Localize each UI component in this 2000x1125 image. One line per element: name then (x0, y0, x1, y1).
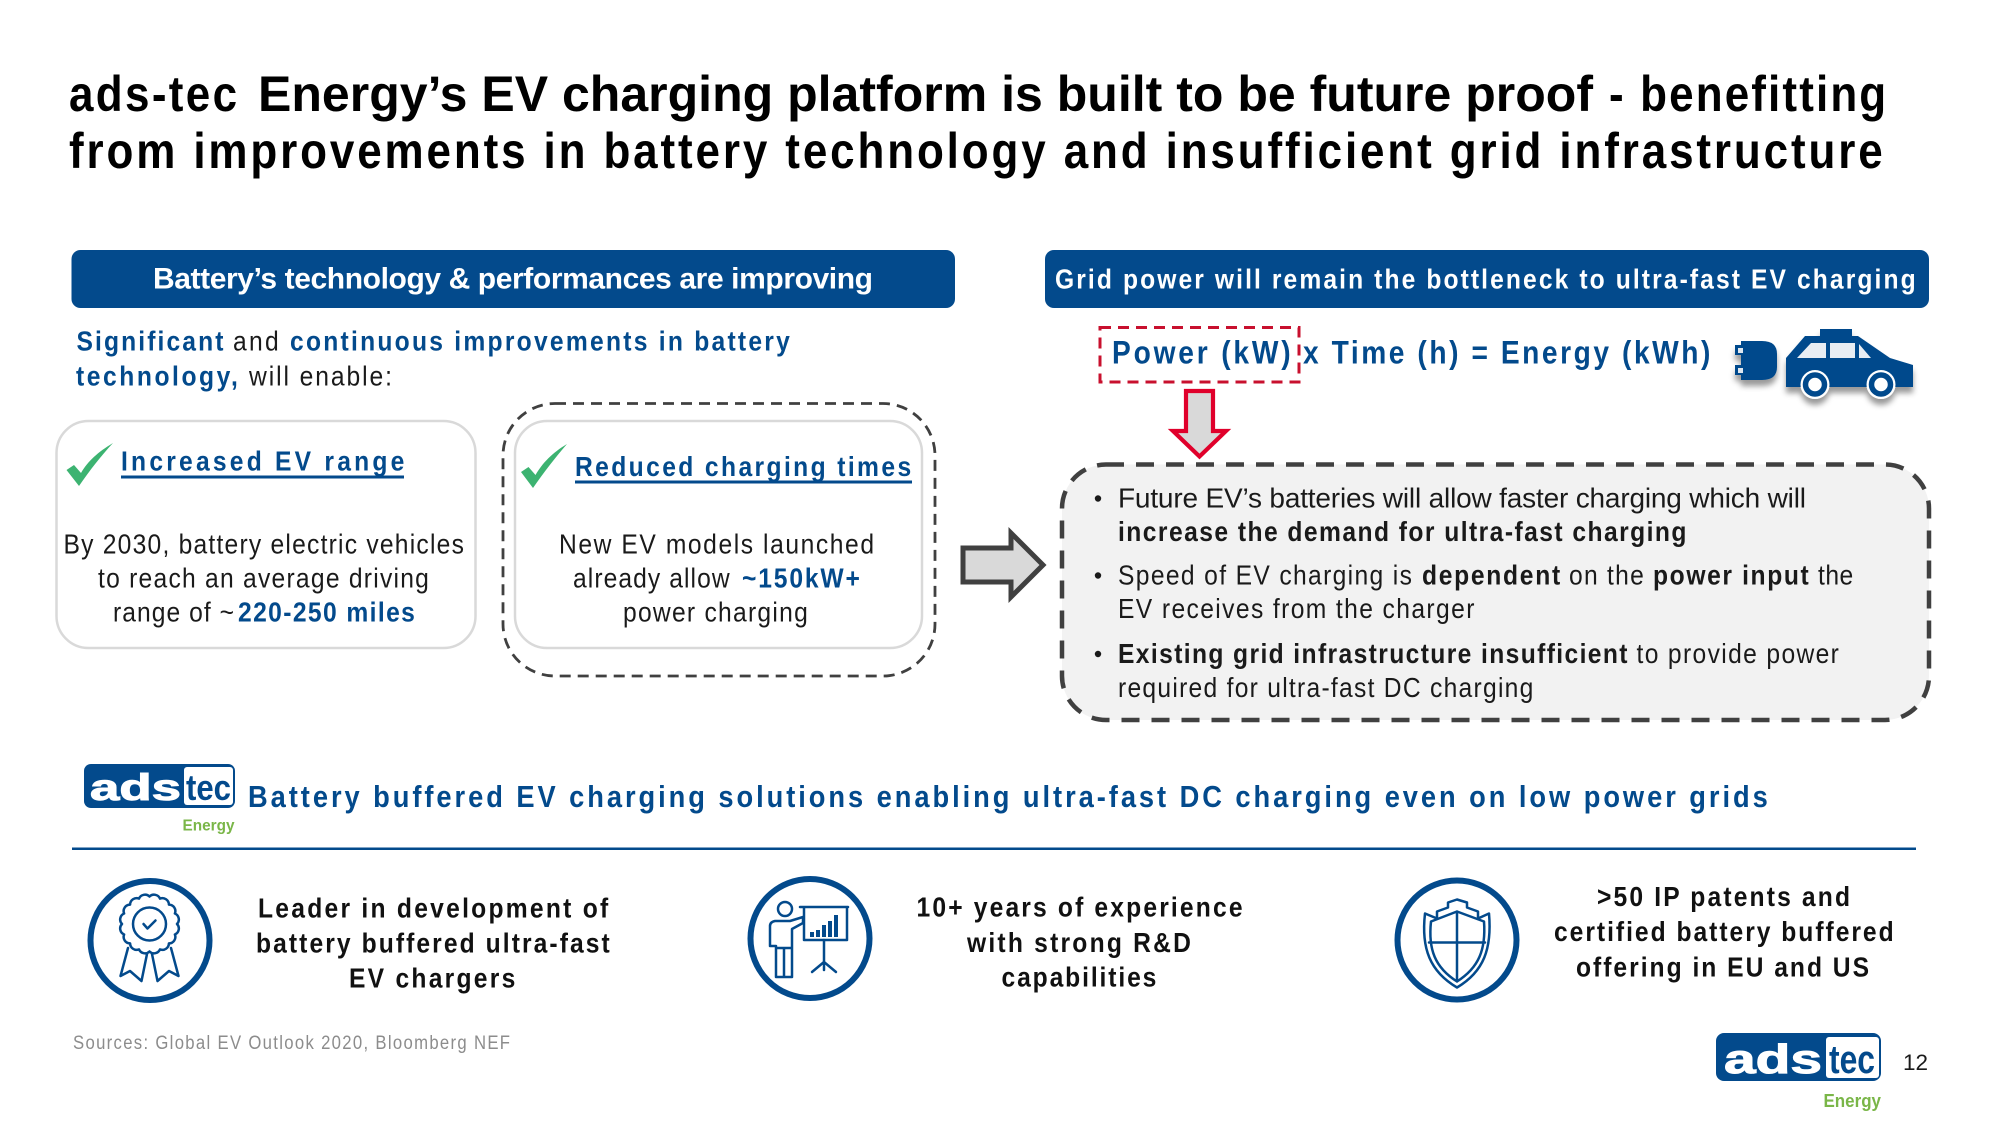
bullet 3: required for ultra-fast DC charging (1118, 672, 1533, 703)
bullet 3: Existing grid infrastructure insufficient (1118, 638, 1628, 669)
intro text: will enable: (248, 360, 392, 392)
intro text: continuous improvements in battery (290, 325, 790, 357)
icon: shield (1398, 880, 1516, 1000)
intro text (76, 325, 790, 392)
card body: to reach an average driving (98, 562, 429, 594)
section heading: Battery buffered EV charging solutions enabling ultra-fast DC charging even on low power grids (248, 780, 1768, 814)
bullet 1: increase the demand for ultra-fast charging (1118, 516, 1686, 547)
icon: plug (1735, 341, 1777, 380)
panel header: grid power (1045, 250, 1929, 308)
text: patents: offering in EU and US (1576, 951, 1869, 983)
logo: ads-tec energy footer: Energy (1824, 1091, 1881, 1111)
bullet 1 (1095, 482, 1806, 547)
text: experience: with strong R&D (966, 927, 1191, 958)
source note: Sources: Global EV Outlook 2020, Bloomberg NEF (73, 1032, 510, 1053)
panel header: battery technology (72, 250, 955, 308)
logo: ads-tec energy: tec (186, 767, 231, 808)
equation highlight box (1100, 328, 1299, 382)
text: experience: 10+ years of experience (916, 891, 1243, 923)
bullet 2: the (1818, 559, 1853, 591)
logo: ads-tec energy: Energy (182, 818, 235, 834)
logo: ads-tec energy: ads (90, 767, 181, 808)
text: patents (1554, 881, 1894, 983)
card body: By 2030, battery electric vehicles (64, 528, 464, 560)
text: patents: >50 IP patents and (1597, 881, 1850, 912)
bullet 2: Speed of EV charging is (1118, 559, 1412, 591)
equation: Power (kW) (1112, 336, 1291, 371)
card body: already allow (573, 562, 731, 594)
icon: check mark (521, 444, 567, 488)
card heading: Reduced charging times (575, 451, 911, 482)
card body: range of ~ (113, 596, 234, 628)
bullet 2: dependent (1422, 559, 1560, 591)
title: from improvements in battery technology and insufficient grid infrastructure (69, 122, 1883, 179)
equation (1112, 336, 1710, 371)
dashed highlight frame (503, 404, 935, 676)
page number: 12 (1903, 1050, 1928, 1075)
title: Energy’s EV charging platform is built to be future proof (258, 66, 1593, 122)
card body: ~150kW+ (742, 562, 860, 594)
intro text: and (233, 325, 279, 357)
panel header: grid power: Grid power will remain the bottleneck to ultra-fast EV charging (1055, 263, 1916, 295)
text: leader: Leader in development of (258, 892, 608, 924)
bullet 2: power input (1653, 559, 1809, 591)
card body: power charging (623, 596, 808, 628)
icon: presenter with chart (750, 879, 870, 998)
text: leader (256, 892, 610, 994)
panel: grid bottleneck bullets (1062, 464, 1929, 720)
intro text: technology, (76, 360, 238, 392)
text: experience (916, 891, 1243, 993)
logo: ads-tec energy (84, 764, 235, 834)
bullet 2: EV receives from the charger (1118, 593, 1475, 624)
equation: x Time (h) = Energy (kWh) (1303, 336, 1710, 371)
text: leader: EV chargers (349, 962, 515, 994)
title (69, 65, 1886, 179)
arrow: red down (1173, 391, 1226, 456)
card body (64, 528, 464, 628)
bullet 3: to provide power (1636, 638, 1839, 669)
title: - benefitting (1609, 65, 1886, 122)
card: increased EV range (56, 421, 476, 648)
card: reduced charging times (515, 421, 922, 648)
arrow: grey right (963, 533, 1043, 597)
logo: ads-tec energy footer: ads (1724, 1036, 1822, 1082)
card heading: Increased EV range (121, 445, 404, 477)
text: leader: battery buffered ultra-fast (256, 927, 610, 959)
icon: check mark (66, 443, 113, 486)
card body: New EV models launched (559, 528, 874, 560)
bullet 3 (1095, 638, 1839, 703)
bullet 2: on the (1569, 559, 1644, 591)
logo: ads-tec energy footer (1716, 1033, 1881, 1111)
card body (559, 528, 874, 628)
bullet 1: Future EV’s batteries will allow faster charging which will (1118, 482, 1806, 514)
bullet 2 (1095, 559, 1853, 624)
text: experience: capabilities (1002, 961, 1156, 993)
icon: award rosette (90, 881, 210, 1000)
intro text: Significant (76, 325, 224, 357)
card body: 220-250 miles (238, 596, 415, 628)
panel header: battery technology: Battery’s technology & performances are improving (153, 262, 873, 296)
icon: electric car (1786, 329, 1913, 399)
logo: ads-tec energy footer: tec (1829, 1038, 1875, 1082)
text: patents: certified battery buffered (1554, 916, 1894, 947)
title: ads-tec (69, 65, 237, 122)
